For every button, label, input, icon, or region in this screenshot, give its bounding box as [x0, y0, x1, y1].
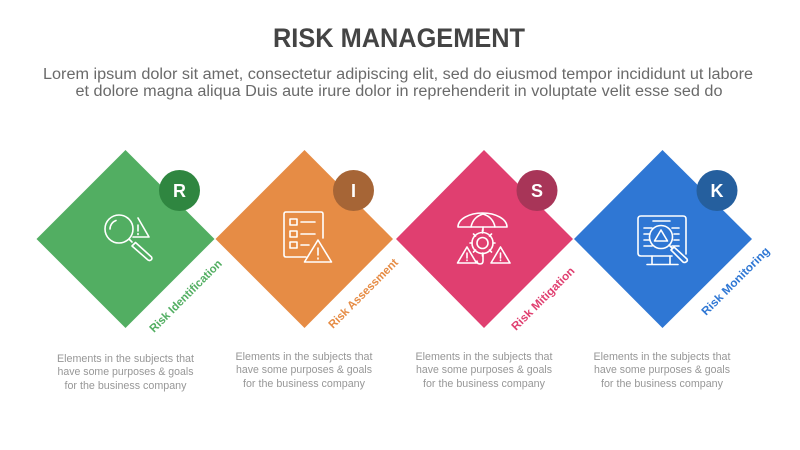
description: have some purposes & goals	[416, 364, 552, 376]
title: RISK MANAGEMENT	[273, 23, 525, 53]
orange diamond	[216, 150, 393, 328]
panel: risk mitigation	[396, 150, 578, 390]
panel: risk identification	[36, 150, 225, 392]
description: Elements in the subjects that	[416, 351, 552, 363]
green diamond	[36, 150, 214, 328]
label: risk monitoring: Risk Monitoring	[700, 245, 772, 318]
letter badge K	[696, 170, 738, 211]
letter badge I: I	[351, 181, 356, 201]
label: risk assessment: Risk Assessment	[327, 257, 401, 331]
description: Elements in the subjects that	[236, 351, 372, 363]
icon: checklist with warning	[284, 212, 332, 262]
blue diamond	[574, 150, 752, 328]
icon: umbrella, gear and warnings	[458, 213, 510, 264]
description	[236, 351, 372, 390]
panel: risk assessment	[216, 150, 401, 390]
description: for the business company	[64, 380, 187, 392]
description: have some purposes & goals	[236, 364, 372, 376]
icon: magnifier with warning	[105, 215, 152, 260]
description: for the business company	[243, 378, 365, 390]
pink diamond	[396, 150, 573, 328]
description	[416, 351, 552, 390]
description	[594, 351, 730, 390]
description	[57, 353, 194, 392]
letter badge R	[159, 170, 200, 211]
label: risk mitigation: Risk Mitigation	[510, 265, 578, 333]
description: have some purposes & goals	[58, 366, 194, 378]
letter badge I	[333, 170, 374, 211]
icon: monitor with magnifier	[638, 216, 687, 264]
description: for the business company	[601, 378, 723, 390]
subtitle text	[43, 66, 753, 100]
letter badge S	[516, 170, 558, 211]
description: Elements in the subjects that	[57, 353, 194, 365]
letter badge S: S	[531, 181, 543, 201]
panel: risk monitoring	[574, 150, 772, 390]
description: have some purposes & goals	[594, 364, 730, 376]
subtitle text: Lorem ipsum dolor sit amet, consectetur adipiscing elit, sed do eiusmod tempor incididunt ut labore	[43, 66, 753, 83]
description: for the business company	[423, 378, 545, 390]
subtitle text: et dolore magna aliqua Duis aute irure dolor in reprehenderit in voluptate velit esse sed do	[76, 83, 722, 100]
label: risk identification: Risk Identification	[148, 258, 225, 335]
letter badge R: R	[173, 181, 186, 201]
letter badge K: K	[710, 181, 724, 201]
description: Elements in the subjects that	[594, 351, 730, 363]
